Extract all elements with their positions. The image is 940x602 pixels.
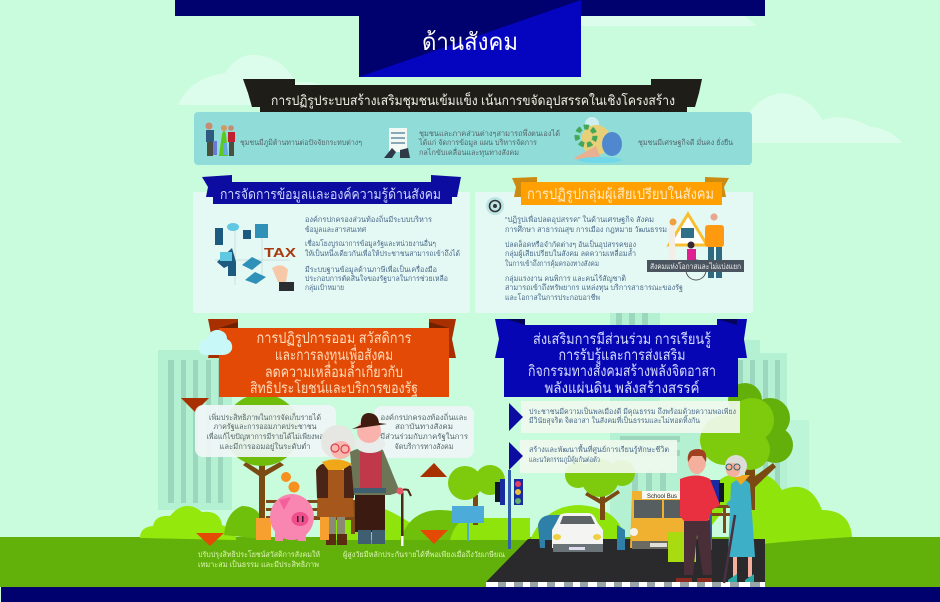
bullet: citizenship: ประชาชนมีความเป็นพลเมืองดี มีคุณธรรม ถึงพร้อมด้วยความพอเพียง <box>529 406 736 416</box>
ribbon: participation heading <box>495 319 747 397</box>
background clouds <box>178 16 902 143</box>
caption: inclusive society: สังคมแห่งโอกาสและไม่แบ่งแยก <box>650 262 741 271</box>
bench <box>266 500 356 534</box>
text: disadvantaged bullets: กลุ่มแรงงาน คนพิการ และคนไร้สัญชาติ <box>505 274 626 283</box>
ribbon: savings and welfare heading: การปฏิรูปการออม สวัสดิการ <box>256 330 412 347</box>
callout: local organisations: จัดบริการทางสังคม <box>394 442 454 451</box>
callout: income: เพิ่มประสิทธิภาพในการจัดเก็บรายได้ <box>209 412 321 422</box>
text: data bullets: ประกอบการตัดสินใจของรัฐบาลในการช่วยเหลือ <box>305 274 448 283</box>
signboard <box>452 506 484 541</box>
ribbon: data heading <box>202 175 461 204</box>
bullet: learning centre <box>509 440 677 473</box>
text: data bullets: มีระบบฐานข้อมูลด้านภาษีเพื่อเป็นเครื่องมือ <box>305 264 437 274</box>
ribbon: participation heading: กิจกรรมทางสังคมสร้างพลังจิตอาสา <box>528 363 716 380</box>
text: self-reliance: กลไกขับเคลื่อนและทุนทางสังคม <box>419 147 519 157</box>
elderly woman <box>724 455 755 583</box>
text: old-age security: ผู้สูงวัยมีหลักประกันรายได้ที่พอเพียงเมื่อถึงวัยเกษียณ <box>343 549 505 559</box>
ground <box>0 537 940 587</box>
woman <box>316 425 355 545</box>
traffic light and bench behind pedestrians <box>706 480 732 550</box>
traffic light: near <box>495 470 523 549</box>
icon: devices and tax <box>215 223 296 291</box>
top bar <box>175 0 765 16</box>
callout: local organisations: องค์กรปกครองท้องถิ่นและ <box>380 412 468 422</box>
text: data bullets <box>305 214 460 292</box>
text: data bullets: องค์กรปกครองส่วนท้องถิ่นมีระบบบริหาร <box>305 214 432 224</box>
ribbon: participation heading: การรับรู้และการส่งเสริม <box>558 347 686 364</box>
text: benefits: เหมาะสม เป็นธรรม และมีประสิทธิภาพ <box>198 559 319 569</box>
text: disadvantaged bullets: “ปฏิรูปเพื่อปลดอุปสรรค” ในด้านเศรษฐกิจ สังคม <box>505 214 654 224</box>
bullet: learning centre: และนวัตกรรมภูมิคุ้มกันต่อตัว <box>529 455 600 464</box>
school bus: School Bus <box>647 493 678 500</box>
marker: local organisations triangle <box>420 463 447 477</box>
bullet: citizenship <box>509 401 740 433</box>
trees <box>224 383 793 525</box>
pedestrians <box>668 449 755 583</box>
title banner <box>359 0 581 77</box>
text: disadvantaged bullets: กลุ่มผู้เสียเปรียบในสังคม ลดความเหลื่อมล้ำ <box>505 248 636 258</box>
text: disadvantaged bullets: สามารถเข้าถึงทรัพยากร แหล่งทุน บริการสาธารณะของรัฐ <box>505 283 683 292</box>
text: disadvantaged bullets <box>505 214 683 302</box>
ribbon: data heading: การจัดการข้อมูลและองค์ความรู้ด้านสังคม <box>220 186 441 203</box>
text: self-reliance: ชุมชนและภาคส่วนต่างๆสามารถพึ่งตนเองได้ <box>419 128 560 138</box>
school bus <box>617 491 690 550</box>
cars <box>538 513 603 552</box>
marker: income triangle <box>181 398 209 412</box>
illustration: inclusive society <box>669 213 724 280</box>
icon: target <box>486 197 504 215</box>
bullet: citizenship: มีวินัยสุจริต จิตอาสา ในสังคมที่เป็นธรรมและไม่ทอดทิ้งกัน <box>529 415 700 425</box>
bottom band <box>1 587 940 602</box>
ribbon: main heading <box>243 79 702 115</box>
text: data bullets: กลุ่มเป้าหมาย <box>305 283 344 292</box>
text: benefits <box>198 550 320 569</box>
callout: income: เพื่อแก้ไขปัญหาการมีรายได้ไม่เพียงพอ <box>206 431 324 441</box>
icon: devices and tax: TAX <box>264 245 296 260</box>
cloud <box>199 330 232 355</box>
ribbon: savings and welfare heading <box>199 319 456 397</box>
bushes <box>140 474 852 545</box>
text: disadvantaged bullets: การศึกษา สาธารณสุข การเมือง กฎหมาย วัฒนธรรม <box>505 225 667 234</box>
text: data bullets: ให้เป็นหนึ่งเดียวกันเพื่อให้ประชาชนสามารถเข้าถึงได้ <box>305 248 460 258</box>
background buildings <box>158 306 809 540</box>
text: disadvantaged bullets: ในการเข้าถึงการคุ้มครองทางสังคม <box>505 259 599 268</box>
panel: data and knowledge <box>193 175 470 313</box>
bullet: learning centre: สร้างและพัฒนาพื้นที่ศูนย์การเรียนรู้ทักษะชีวิต <box>529 444 669 454</box>
ribbon: main heading: การปฏิรูประบบสร้างเสริมชุมชนเข้มแข็ง เน้นการขจัดอุปสรรคในเชิงโครงสร้าง <box>271 91 675 109</box>
callout: local organisations: มีส่วนร่วมกับภาครัฐในการ <box>380 432 468 441</box>
road <box>486 539 765 587</box>
icon: document and hands <box>384 128 410 158</box>
ribbon: savings and welfare heading: และการลงทุนเพื่อสังคม <box>275 344 393 365</box>
title banner: ด้านสังคม <box>422 29 518 56</box>
text: disadvantaged bullets: และโอกาสในการประกอบอาชีพ <box>505 293 600 302</box>
callout: income <box>195 405 336 457</box>
icon: goals wheel <box>574 117 622 163</box>
ribbon: savings and welfare heading: สิทธิประโยชน์และบริการของรัฐ <box>250 379 418 397</box>
marker: old-age security triangle <box>420 530 448 544</box>
caption: inclusive society <box>647 260 744 272</box>
marker: benefits triangle <box>196 533 224 546</box>
callout: income: และมีการออมอยู่ในระดับต่ำ <box>220 441 310 451</box>
text: economy: ชุมชนมีเศรษฐกิจดี มั่นคง ยั่งยืน <box>638 137 733 147</box>
panel: community strengths <box>194 112 752 165</box>
text: data bullets: เชื่อมโยงบูรณาการข้อมูลรัฐและหน่วยงานอื่นๆ <box>305 238 436 248</box>
text: benefits: ปรับปรุงสิทธิประโยชน์สวัสดิการสังคมให้ <box>198 550 320 559</box>
callout: income: ภาครัฐและการออมภาคประชาชน <box>214 422 316 431</box>
text: disadvantaged bullets: ปลดล็อคหรือจำกัดต่างๆ อันเป็นอุปสรรคของ <box>505 239 636 249</box>
ribbon: participation heading: ส่งเสริมการมีส่วนร่วม การเรียนรู้ <box>533 331 711 348</box>
ribbon: disadvantaged heading <box>512 177 729 205</box>
text: self-reliance <box>418 128 560 157</box>
icon: family <box>206 122 235 156</box>
text: self-reliance: ได้แก่ จัดการข้อมูล แผน บริหารจัดการ <box>418 138 537 147</box>
elders <box>266 413 411 546</box>
man <box>350 413 411 546</box>
text: resilience: ชุมชนมีภูมิต้านทานต่อปัจจัยกระทบต่างๆ <box>240 138 362 147</box>
ribbon: participation heading: พลังแผ่นดิน พลังสร้างสรรค์ <box>544 380 700 397</box>
text: data bullets: ข้อมูลและสารสนเทศ <box>305 225 366 234</box>
callout: local organisations: สถาบันทางสังคม <box>395 422 453 431</box>
piggy bank and coins <box>256 472 329 541</box>
ribbon: savings and welfare heading: ลดความเหลื่อมล้ำเกี่ยวกับ <box>265 361 403 381</box>
ribbon: disadvantaged heading: การปฏิรูปกลุ่มผู้เสียเปรียบในสังคม <box>527 185 714 203</box>
callout: local organisations <box>374 406 474 458</box>
man in red <box>668 449 720 582</box>
panel: disadvantaged groups <box>475 177 753 313</box>
